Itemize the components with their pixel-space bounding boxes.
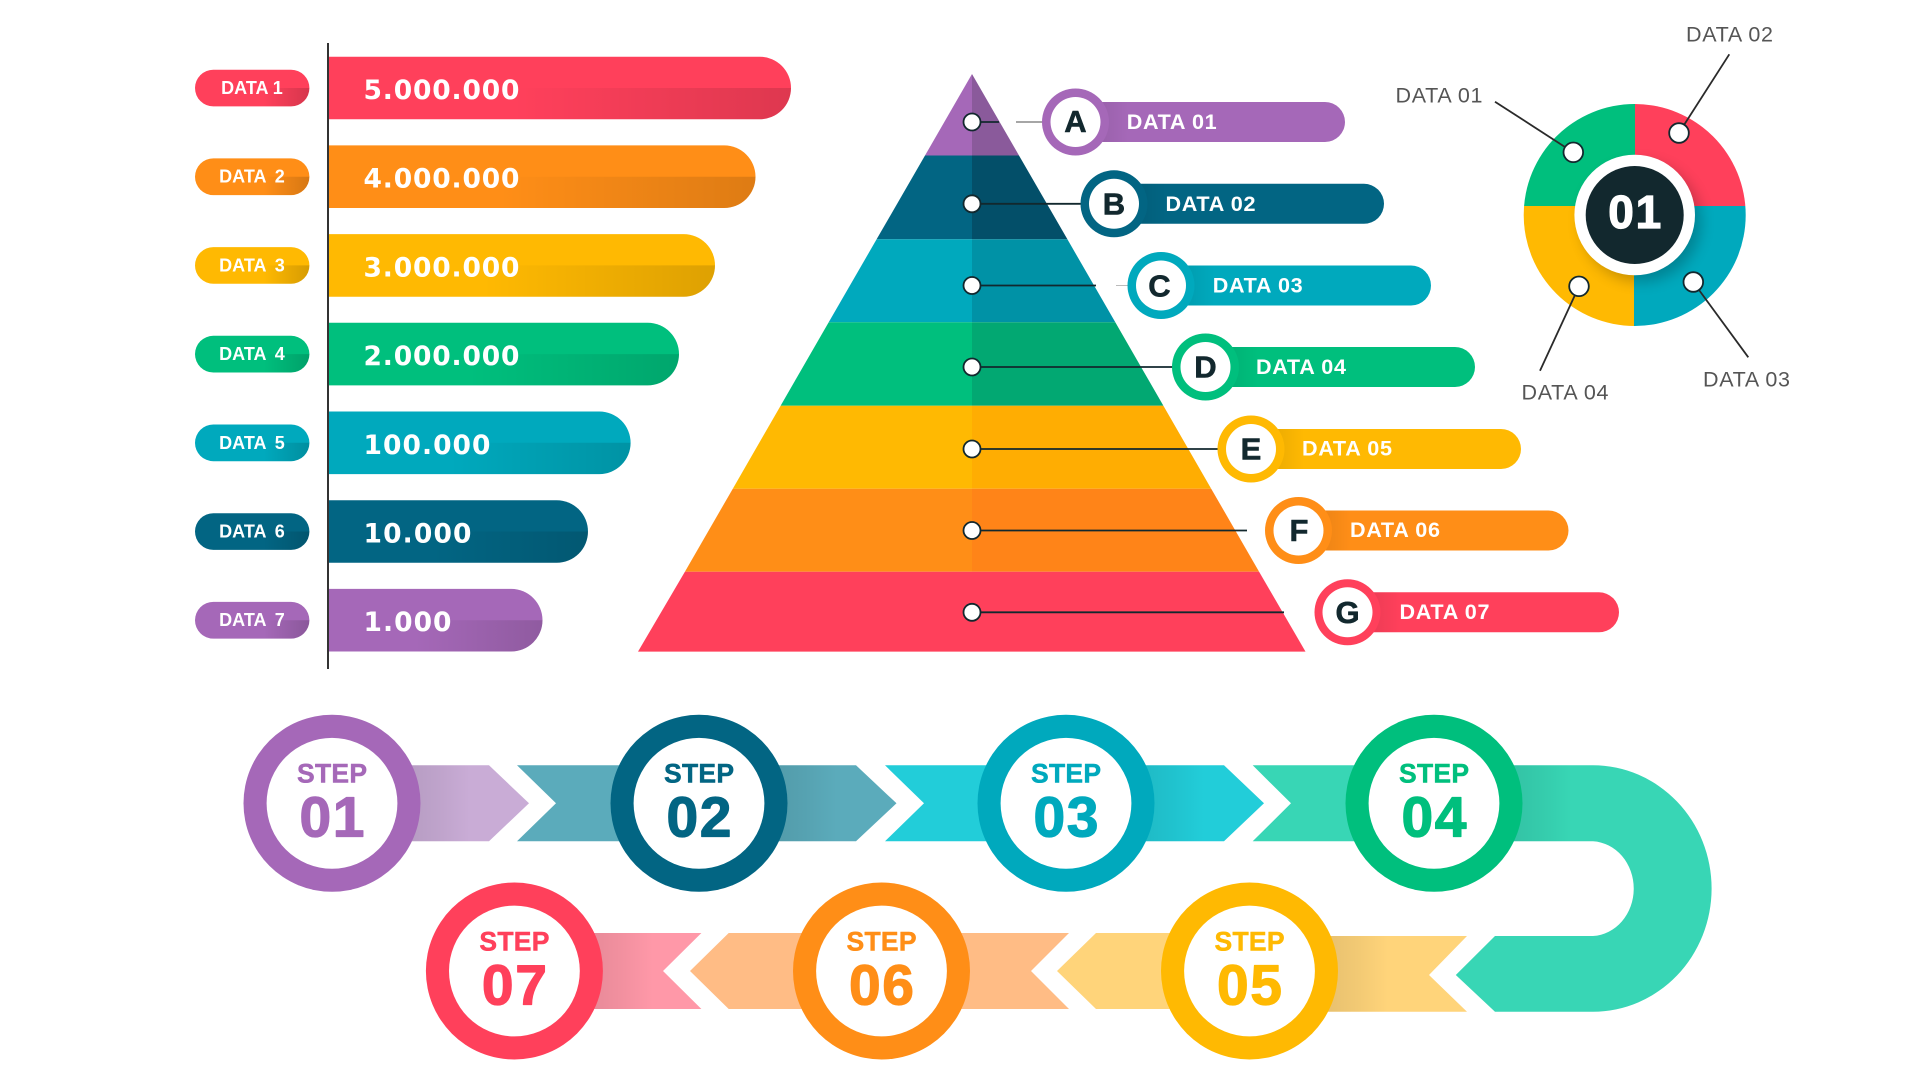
callout: DATA 03 — [1684, 272, 1790, 392]
label F: DATA 06: F — [1290, 513, 1308, 548]
step 02: STEP — [664, 759, 734, 789]
arrow: step 2 — [517, 765, 896, 841]
arrow: step 1 — [332, 765, 529, 841]
callout: DATA 02: DATA 02 — [1686, 23, 1773, 47]
step 05 — [1161, 882, 1338, 1060]
step 01: 01 — [300, 786, 364, 850]
step 06: 06 — [849, 953, 914, 1017]
step 04: 04 — [1402, 786, 1467, 850]
label C: DATA 03 — [1128, 252, 1431, 319]
callout: DATA 01 — [1396, 83, 1583, 162]
pill: DATA 3: DATA 3 — [219, 255, 285, 275]
label E: DATA 05: E — [1241, 432, 1261, 466]
label B: DATA 02: DATA 02 — [1166, 191, 1256, 216]
bar: 2.000.000 — [329, 323, 679, 385]
panel: step process flow — [244, 715, 1712, 1060]
pill: DATA 5: DATA 5 — [219, 433, 285, 453]
step 07: 07 — [482, 953, 547, 1017]
step 06 — [793, 882, 970, 1060]
axis line — [327, 43, 329, 669]
pill: DATA 3 — [195, 247, 309, 284]
step 02: 02 — [666, 786, 732, 850]
pill: DATA 1: DATA 1 — [221, 78, 283, 98]
panel: horizontal bar chart — [195, 43, 791, 669]
label D: DATA 04 — [1172, 334, 1475, 400]
step 03: 03 — [1034, 786, 1098, 850]
label A: DATA 01: DATA 01 — [1127, 109, 1217, 134]
callout: DATA 01: DATA 01 — [1396, 83, 1482, 107]
pyramid band: navy — [877, 156, 1067, 239]
bar: 3.000.000: 3.000.000 — [364, 252, 520, 283]
pill: DATA 4 — [195, 336, 309, 372]
step 03: STEP — [1031, 759, 1101, 789]
step 07 — [426, 882, 603, 1060]
label E: DATA 05 — [1218, 416, 1521, 482]
bar: 1.000 — [329, 589, 542, 652]
pill: DATA 5 — [195, 424, 309, 461]
pyramid band: teal — [829, 239, 1115, 322]
label E: DATA 05: DATA 05 — [1302, 436, 1392, 460]
pill: DATA 7 — [195, 602, 309, 639]
arrow: step 6 — [690, 933, 1069, 1009]
pyramid band: purple — [925, 74, 1019, 156]
arrow: step 4 U-turn — [1253, 765, 1712, 1012]
label F: DATA 06 — [1265, 497, 1568, 564]
arrow: step 5 — [1057, 933, 1467, 1012]
bar: 3.000.000 — [329, 234, 715, 297]
pill: DATA 2 — [195, 158, 309, 195]
callout: DATA 04 — [1522, 276, 1609, 404]
bar: 10.000 — [329, 500, 588, 563]
pill: DATA 4: DATA 4 — [219, 344, 285, 364]
pill: DATA 2: DATA 2 — [219, 167, 285, 187]
step 01: STEP — [297, 759, 367, 789]
callout: DATA 02 — [1669, 23, 1773, 143]
step 07: STEP — [479, 927, 549, 957]
callout: DATA 03: DATA 03 — [1703, 368, 1790, 392]
bar: 4.000.000 — [329, 145, 756, 208]
bar: 5.000.000: 5.000.000 — [364, 75, 520, 106]
donut centre: 01 — [1574, 155, 1695, 275]
label A: DATA 01 — [1042, 88, 1345, 156]
step 05: STEP — [1214, 927, 1284, 957]
label G: DATA 07 — [1314, 579, 1619, 645]
step 02 — [610, 715, 788, 892]
step 04 — [1346, 715, 1522, 892]
connector lines — [972, 122, 1284, 612]
bar: 2.000.000: 2.000.000 — [364, 341, 520, 372]
panel: pyramid chart — [638, 74, 1619, 652]
panel: donut chart — [1396, 23, 1790, 404]
pill: DATA 6: DATA 6 — [219, 522, 285, 542]
step 05: 05 — [1217, 953, 1282, 1017]
label D: DATA 04: DATA 04 — [1256, 354, 1346, 379]
label G: DATA 07: DATA 07 — [1400, 599, 1490, 624]
bar: 5.000.000 — [329, 57, 791, 119]
arrow: step 7 — [514, 933, 701, 1009]
bar: 100.000 — [329, 412, 631, 474]
label C: DATA 03: C — [1148, 268, 1171, 304]
pyramid band: yellow — [733, 406, 1211, 489]
donut segments — [1520, 100, 1750, 331]
label G: DATA 07: G — [1335, 595, 1360, 630]
step 03 — [978, 715, 1154, 892]
pill: DATA 7: DATA 7 — [219, 610, 285, 630]
bar: 10.000: 10.000 — [364, 518, 472, 550]
bar: 100.000: 100.000 — [364, 430, 490, 461]
step 04: STEP — [1399, 759, 1469, 789]
step 06: STEP — [846, 927, 916, 957]
arrow: step 3 — [885, 765, 1264, 841]
pill: DATA 6 — [195, 513, 309, 550]
label A: DATA 01: A — [1064, 104, 1087, 139]
pyramid band: red — [638, 572, 1306, 652]
step 01 — [244, 715, 420, 892]
pyramid band: orange — [685, 489, 1259, 572]
label D: DATA 04: D — [1194, 350, 1217, 384]
label C: DATA 03: DATA 03 — [1213, 272, 1303, 298]
donut centre: 01: 01 — [1608, 186, 1661, 238]
pyramid band: green — [781, 322, 1163, 406]
label B: DATA 02: B — [1103, 186, 1125, 222]
pyramid dots — [964, 114, 980, 621]
bar: 1.000: 1.000 — [364, 607, 452, 638]
bar: 4.000.000: 4.000.000 — [364, 164, 520, 195]
label F: DATA 06: DATA 06 — [1350, 517, 1440, 542]
callout: DATA 04: DATA 04 — [1522, 380, 1609, 404]
pill: DATA 1 — [195, 70, 309, 106]
label B: DATA 02 — [1080, 170, 1384, 237]
